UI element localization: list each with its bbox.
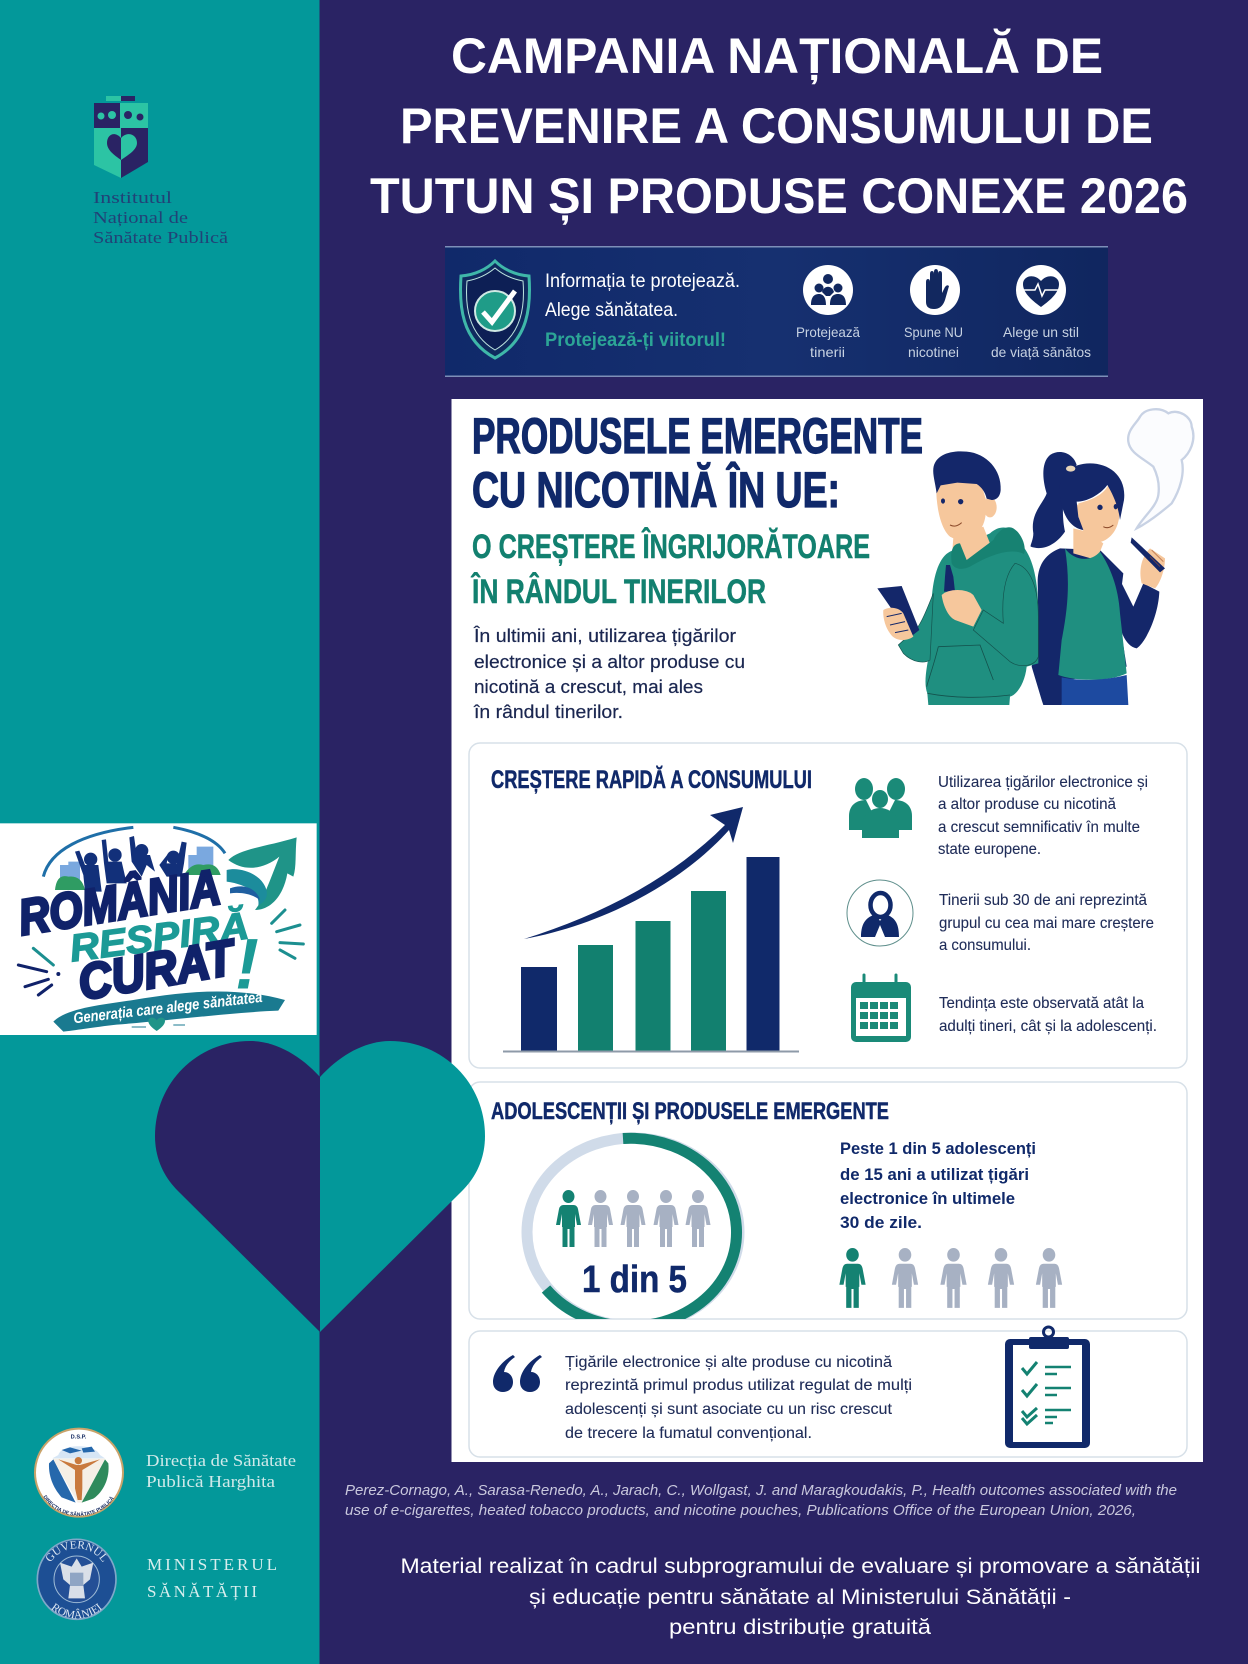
text: RESPIRĂ: RESPIRĂ bbox=[67, 903, 251, 971]
text: citation bbox=[345, 1482, 1177, 1519]
panel: teal left sidebar bbox=[0, 0, 320, 1664]
text: DSP name bbox=[146, 1451, 296, 1491]
text: institute name: Național de bbox=[93, 208, 188, 227]
text: funding note bbox=[400, 1555, 1200, 1639]
icon: government seal: GUVERNUL bbox=[46, 1540, 107, 1562]
heading: emerging nicotine products: CU NICOTINĂ ÎN UE: bbox=[472, 462, 840, 518]
banner: slogan ribbon bbox=[53, 991, 285, 1032]
text: under 30 group: a consumului. bbox=[939, 937, 1031, 954]
arrow: upward trend bbox=[524, 807, 743, 939]
text: exclamation mark: ! bbox=[235, 924, 259, 1004]
icon: small heart under ribbon bbox=[132, 1018, 185, 1031]
text: trend in adults and teenagers: adulți tineri, cât și la adolescenți. bbox=[939, 1018, 1157, 1035]
heading: rapid growth: CREȘTERE RAPIDĂ A CONSUMULUI bbox=[491, 765, 812, 794]
logo: Direcția de Sănătate Publică Harghita bbox=[34, 1428, 296, 1518]
icon: protect youth bbox=[803, 265, 853, 315]
panel: rapid growth in consumption bbox=[469, 743, 1187, 1068]
logo: Institutul Național de Sănătate Publică bbox=[93, 96, 229, 247]
icon: government seal bbox=[36, 1538, 117, 1620]
heading: teenagers section: ADOLESCENȚII ȘI PRODUSELE EMERGENTE bbox=[491, 1098, 889, 1125]
text: say no label: nicotinei bbox=[908, 344, 959, 360]
panel: teenagers and emerging products bbox=[469, 1082, 1187, 1326]
text: citation: use of e-cigarettes, heated tobacco products, and nicotine pouches, Publications Office of the European Union, 2026, bbox=[345, 1502, 1136, 1519]
text: say no label: Spune NU bbox=[904, 324, 963, 340]
donut chart: 1 in 5 ring bbox=[527, 1138, 739, 1326]
icon: DSP seal: DIRECȚIA DE SĂNĂTATE PUBLICĂ bbox=[44, 1495, 114, 1516]
text: funding note: Material realizat în cadrul subprogramului de evaluare și promovare a sănătății bbox=[400, 1555, 1200, 1578]
icon: DSP seal: D.S.P. bbox=[71, 1435, 87, 1441]
text: intro paragraph: În ultimii ani, utilizarea țigărilor bbox=[473, 626, 736, 646]
icon: shield with check bbox=[460, 261, 530, 358]
bar chart: growth bars bbox=[503, 857, 799, 1052]
icon: large heart bbox=[155, 1041, 485, 1332]
text: protect youth label: Protejează bbox=[796, 324, 860, 340]
panel: white infographic sheet bbox=[452, 399, 1203, 1462]
text: banner slogan: Alege sănătatea. bbox=[545, 300, 678, 321]
text: teenagers statistic bbox=[840, 1139, 1036, 1232]
illustration: vapour cloud bbox=[1128, 409, 1193, 528]
icon: young person in circle bbox=[847, 880, 913, 946]
icon: group of people bbox=[849, 778, 912, 838]
icon: clipboard checklist bbox=[1005, 1327, 1090, 1448]
text: healthy lifestyle label: de viață sănătos bbox=[991, 344, 1091, 360]
text: CURAT: CURAT bbox=[74, 929, 242, 1011]
text: use increased: Utilizarea țigărilor electronice și bbox=[938, 774, 1148, 791]
text: intro paragraph bbox=[473, 626, 745, 722]
text: use increased bbox=[938, 774, 1148, 858]
number: 1 din 5: 1 din 5 bbox=[582, 1259, 687, 1301]
illustration: leaf bbox=[227, 837, 297, 910]
text: intro paragraph: în rândul tinerilor. bbox=[473, 702, 623, 722]
text: banner slogan: Informația te protejează. bbox=[545, 271, 740, 292]
text: ministry name: MINISTERUL bbox=[147, 1555, 277, 1574]
text: quote body: adolescenți și sunt asociate cu un risc crescut bbox=[565, 1401, 893, 1418]
text: ribbon slogan: Generația care alege sănătatea bbox=[73, 989, 264, 1027]
text: healthy lifestyle label: Alege un stil bbox=[1003, 324, 1079, 340]
text: trend in adults and teenagers: Tendința este observată atât la bbox=[939, 995, 1144, 1012]
text: use increased: state europene. bbox=[938, 841, 1041, 858]
logo: Ministerul Sănătății bbox=[36, 1538, 277, 1620]
icon: stop hand bbox=[910, 265, 960, 315]
text: quote body: de trecere la fumatul convențional. bbox=[565, 1425, 812, 1442]
text: quote body: reprezintă primul produs utilizat regulat de mulți bbox=[565, 1377, 912, 1394]
text: teenagers statistic: electronice în ultimele bbox=[840, 1189, 1015, 1208]
text: institute name: Institutul bbox=[93, 188, 172, 207]
illustration: boy bbox=[877, 451, 1038, 705]
icon: DSP seal bbox=[34, 1428, 124, 1518]
illustration: raised-arm silhouettes bbox=[75, 836, 187, 892]
text: healthy lifestyle label bbox=[991, 324, 1091, 360]
icon: heart with pulse bbox=[1016, 265, 1066, 315]
text: intro paragraph: electronice și a altor produse cu bbox=[474, 652, 745, 672]
text: under 30 group: grupul cu cea mai mare creștere bbox=[939, 915, 1154, 932]
text: say no label bbox=[904, 324, 963, 360]
heading: emerging nicotine products: PRODUSELE EMERGENTE bbox=[472, 408, 923, 464]
panel: campaign banner bbox=[445, 246, 1108, 377]
text: use increased: a crescut semnificativ în multe bbox=[938, 819, 1140, 836]
text: teenagers statistic: de 15 ani a utilizat țigări bbox=[840, 1165, 1029, 1184]
title: TUTUN ȘI PRODUSE CONEXE 2026 bbox=[370, 168, 1188, 224]
text: quote body bbox=[565, 1354, 912, 1442]
icon row: five people pictogram bbox=[839, 1248, 1062, 1308]
text: quote body: Țigările electronice și alte produse cu nicotină bbox=[565, 1354, 892, 1371]
icon row: five people inside ring bbox=[556, 1190, 710, 1247]
text: citation: Perez-Cornago, A., Sarasa-Renedo, A., Jarach, C., Wollgast, J. and Maragkoudakis, P., Health outcomes associated with the bbox=[345, 1482, 1177, 1499]
text: intro paragraph: nicotină a crescut, mai ales bbox=[474, 677, 703, 697]
illustration: arc and skyline bbox=[43, 827, 225, 890]
icon: quotation marks bbox=[493, 1355, 542, 1392]
subheading: worrying rise among youth bbox=[470, 528, 870, 611]
subheading: worrying rise among youth: ÎN RÂNDUL TINERILOR bbox=[470, 573, 766, 611]
heading: emerging nicotine products bbox=[472, 408, 923, 518]
icon: calendar bbox=[851, 975, 911, 1042]
text: protect youth label: tinerii bbox=[810, 344, 845, 360]
text: institute name bbox=[93, 188, 229, 247]
panel: quote bbox=[469, 1327, 1187, 1457]
text: banner slogan bbox=[545, 271, 740, 351]
text: DSP name: Direcția de Sănătate bbox=[146, 1451, 296, 1470]
icon: government seal: ROMÂNIEI bbox=[51, 1602, 102, 1618]
text: DSP name: Publică Harghita bbox=[146, 1472, 275, 1491]
text: teenagers statistic: Peste 1 din 5 adolescenți bbox=[840, 1139, 1036, 1158]
text: trend in adults and teenagers bbox=[939, 995, 1157, 1035]
title: PREVENIRE A CONSUMULUI DE bbox=[400, 98, 1153, 154]
logo: România Respiră Curat bbox=[0, 823, 317, 1035]
text: use increased: a altor produse cu nicotină bbox=[938, 796, 1116, 813]
text: teenagers statistic: 30 de zile. bbox=[840, 1213, 922, 1232]
illustration: spark strokes bbox=[18, 910, 303, 995]
text: under 30 group bbox=[939, 892, 1154, 954]
text: ROMÂNIA: ROMÂNIA bbox=[15, 859, 224, 946]
illustration: girl bbox=[1031, 452, 1165, 705]
title: CAMPANIA NAȚIONALĂ DE bbox=[451, 28, 1103, 84]
text: banner slogan: Protejează-ți viitorul! bbox=[545, 330, 726, 351]
text: funding note: și educație pentru sănătate al Ministerului Sănătății - bbox=[529, 1586, 1071, 1609]
text: protect youth label bbox=[796, 324, 860, 360]
text: institute name: Sănătate Publică bbox=[93, 228, 229, 247]
subheading: worrying rise among youth: O CREȘTERE ÎNGRIJORĂTOARE bbox=[472, 528, 870, 566]
text: ministry name bbox=[147, 1555, 277, 1601]
text: under 30 group: Tinerii sub 30 de ani reprezintă bbox=[939, 892, 1147, 909]
text: ministry name: SĂNĂTĂȚII bbox=[147, 1582, 257, 1601]
text: funding note: pentru distribuție gratuită bbox=[669, 1616, 931, 1639]
illustration: two teenagers with vape and phone bbox=[877, 409, 1193, 705]
icon: shield crest bbox=[94, 96, 148, 178]
title bbox=[370, 28, 1188, 224]
